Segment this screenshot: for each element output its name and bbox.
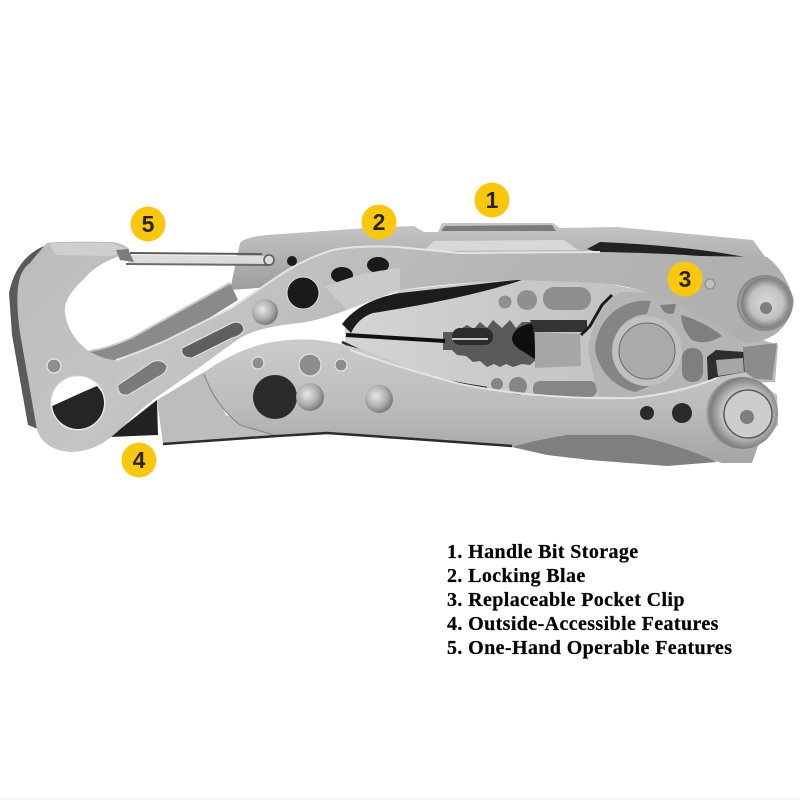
dark spine behind carabiner xyxy=(9,246,44,430)
wire bottom shadow xyxy=(126,264,268,265)
small hole in upper handle xyxy=(287,256,297,266)
marker 4: 4 xyxy=(133,447,146,473)
large lanyard hole with bit xyxy=(50,376,108,433)
jaw holes upper xyxy=(498,287,591,310)
wire top shadow xyxy=(130,253,262,254)
pivot ring crescent xyxy=(595,301,651,392)
upper handle large hole xyxy=(287,277,319,309)
serrated wire cutter xyxy=(443,320,536,367)
jaw right dark edge xyxy=(581,295,612,335)
locking blade tab xyxy=(325,268,400,310)
feature legend: 2. Locking Blae xyxy=(447,565,586,587)
pivot plate xyxy=(588,292,745,398)
cutter dark slot xyxy=(452,328,493,345)
bottom edge strip xyxy=(0,798,800,800)
upper handle top highlight xyxy=(116,246,600,360)
light tang face xyxy=(716,358,744,376)
pivot hub xyxy=(612,316,682,386)
wire tip xyxy=(116,249,134,262)
plier jaw serrated line xyxy=(346,335,445,341)
wire body xyxy=(128,259,268,260)
stored bit xyxy=(52,386,104,429)
marker 4 xyxy=(122,442,156,478)
lower body division line xyxy=(204,374,277,436)
pivot centre disc xyxy=(619,323,675,379)
central plier plate xyxy=(345,278,778,400)
handle bit storage slot xyxy=(441,225,556,231)
hole xyxy=(51,376,105,430)
cutter slot highlight xyxy=(452,338,488,340)
dark line between lower jaw and handle xyxy=(342,342,487,388)
marker 5 xyxy=(130,206,166,242)
lower handle top highlight xyxy=(350,350,717,398)
cutter round hole xyxy=(512,323,536,360)
upper screw xyxy=(737,275,793,331)
blade holes xyxy=(331,257,389,283)
dark gap under top body xyxy=(587,242,750,258)
slot upper xyxy=(182,322,244,358)
lower handle shadow edge xyxy=(163,433,512,446)
feature legend: 4. Outside-Accessible Features xyxy=(447,613,719,635)
small hole in carabiner xyxy=(47,359,61,373)
dark band above upper jaw xyxy=(342,279,525,333)
lower handle xyxy=(203,339,778,463)
dark bit below carabiner xyxy=(110,400,158,437)
lower handle holes xyxy=(253,375,692,423)
dark tang block xyxy=(707,350,745,382)
screw slot xyxy=(760,302,772,314)
jaw shank block xyxy=(535,332,581,368)
lower handle rivets xyxy=(296,383,393,413)
multi-tool illustration xyxy=(9,223,794,466)
marker 3 xyxy=(668,262,702,296)
clip screw hole xyxy=(705,279,715,289)
small lower handle holes xyxy=(252,354,347,376)
feature legend xyxy=(447,541,732,659)
feature legend: 5. One-Hand Operable Features xyxy=(447,637,732,659)
marker 1: 1 xyxy=(486,187,499,213)
dark block behind jaw shank xyxy=(530,320,587,332)
upper handle with carabiner xyxy=(17,242,794,452)
light edge of carabiner throat xyxy=(90,283,230,351)
feature legend: 3. Replaceable Pocket Clip xyxy=(447,589,685,611)
marker 2: 2 xyxy=(373,209,385,235)
screw cap xyxy=(724,390,772,438)
carabiner gate wire xyxy=(116,249,274,265)
wire loop end xyxy=(264,255,274,265)
infographic canvas xyxy=(0,182,800,800)
back body top edge xyxy=(230,223,775,290)
marker 5: 5 xyxy=(142,211,155,237)
grey band of carabiner throat xyxy=(83,283,238,362)
jaw holes lower xyxy=(491,377,597,397)
marker 3: 3 xyxy=(679,266,691,292)
slot lower xyxy=(118,361,167,395)
pivot cut-outs xyxy=(660,304,722,382)
feature legend: 1. Handle Bit Storage xyxy=(447,541,639,563)
top plate highlight xyxy=(423,240,578,251)
carabiner hook top highlight xyxy=(50,243,128,256)
marker 1 xyxy=(474,182,510,218)
right side plate xyxy=(743,343,777,380)
grey grip xyxy=(512,435,717,466)
screw head rim xyxy=(737,275,793,331)
screw body xyxy=(706,377,778,449)
lower body left xyxy=(157,372,277,444)
lower screw xyxy=(706,377,778,449)
screw cap xyxy=(739,278,789,328)
diagonal slots with stored bits xyxy=(118,322,244,395)
marker 2 xyxy=(362,204,396,240)
upper handle rivet xyxy=(252,299,278,325)
screw head xyxy=(740,410,754,424)
